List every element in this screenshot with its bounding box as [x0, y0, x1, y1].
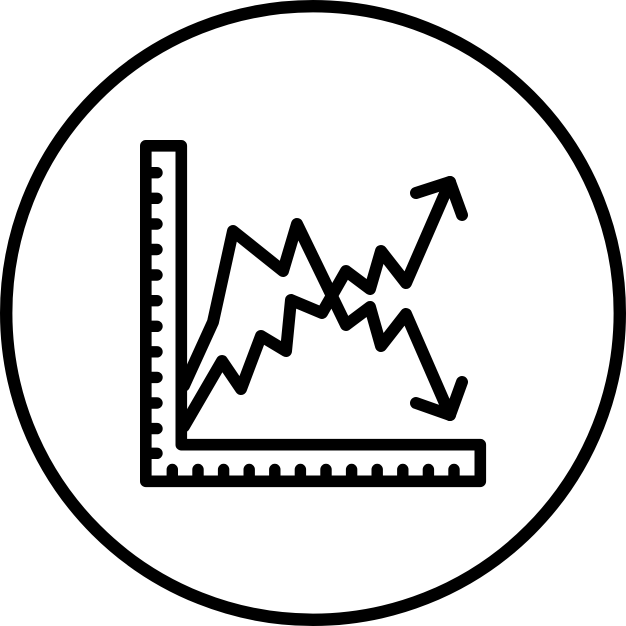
- L-shaped ruler axes: [146, 146, 480, 481]
- series: rising line with up arrow: [184, 182, 462, 426]
- series: falling line with down arrow: [184, 224, 462, 415]
- ruler ticks: vertical axis: [150, 173, 157, 453]
- ruler ticks: horizontal axis: [172, 470, 454, 476]
